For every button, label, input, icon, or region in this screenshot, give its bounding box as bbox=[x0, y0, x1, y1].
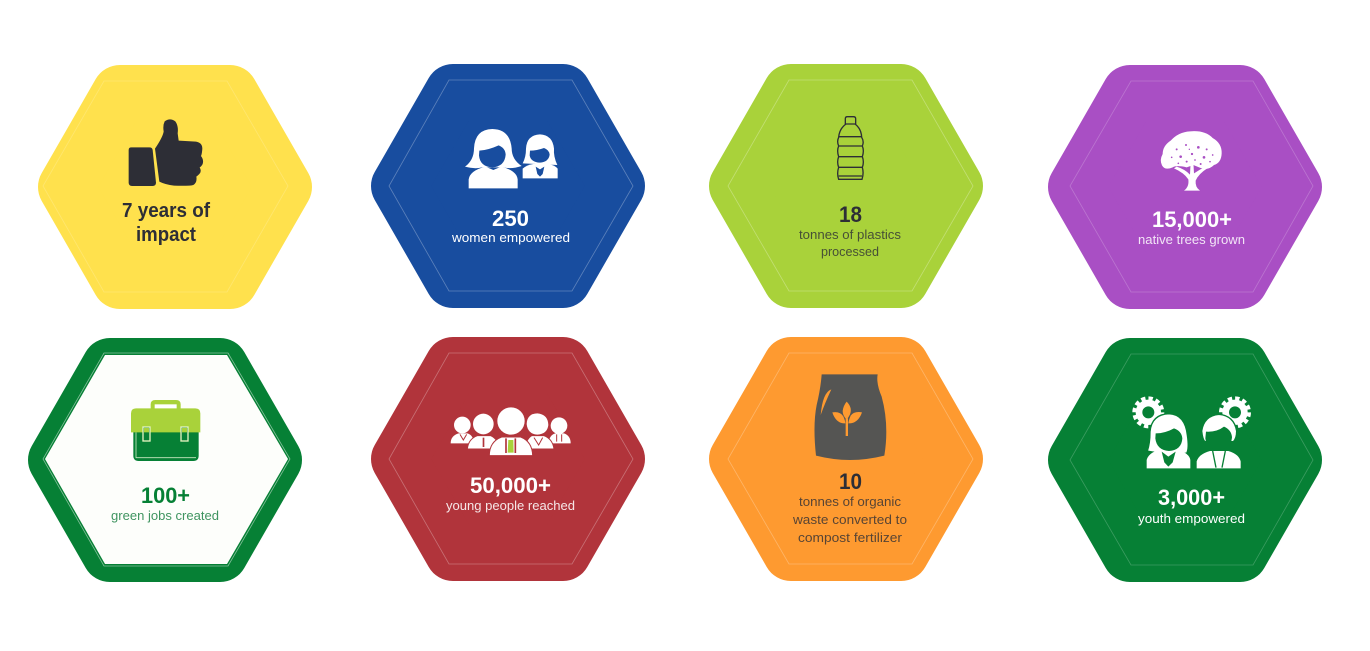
panel: tonnes of organic waste converted to compost fertilizer bbox=[728, 353, 973, 564]
icon: compost bag bbox=[814, 374, 886, 460]
panel: young people reached bbox=[389, 353, 633, 564]
stat: 10 tonnes of organic waste converted to compost fertilizer: compost fertilizer bbox=[798, 530, 903, 545]
icon: group of people bbox=[451, 407, 571, 456]
stat: 10 tonnes of organic waste converted to compost fertilizer: waste converted to bbox=[792, 512, 907, 527]
hexagon: lime bbox=[737, 92, 955, 280]
stat: 15,000+ native trees grown bbox=[1138, 207, 1245, 247]
hexagon: blue bbox=[399, 92, 617, 280]
stat: 15,000+ native trees grown: 15,000+ bbox=[1152, 207, 1232, 232]
stat: 18 tonnes of plastics processed bbox=[799, 202, 901, 259]
panel: green jobs created bbox=[43, 353, 290, 566]
icon: tree bbox=[1161, 131, 1222, 191]
stat: 250 women empowered bbox=[451, 206, 570, 245]
hexagon: red bbox=[399, 365, 617, 553]
heading: 7 years of impact: 7 years of bbox=[122, 200, 210, 222]
stat: 15,000+ native trees grown: native trees grown bbox=[1138, 232, 1245, 247]
stat: 3,000+ youth empowered: 3,000+ bbox=[1158, 485, 1225, 510]
stat: 100+ green jobs created bbox=[111, 483, 219, 523]
stat: 3,000+ youth empowered: youth empowered bbox=[1138, 511, 1245, 526]
stat: 250 women empowered: 250 bbox=[492, 206, 529, 231]
panel: tonnes of plastics processed bbox=[728, 80, 973, 291]
stat: 250 women empowered: women empowered bbox=[451, 230, 570, 245]
hexagon: orange bbox=[737, 365, 955, 553]
stat: 18 tonnes of plastics processed: processed bbox=[821, 244, 879, 259]
hexagon: yellow bbox=[66, 93, 284, 281]
hexagon: dark green bbox=[1076, 366, 1294, 554]
stat: 50,000+ young people reached: young people reached bbox=[446, 498, 575, 513]
panel: native trees grown bbox=[1070, 81, 1313, 292]
heading: 7 years of impact: impact bbox=[136, 224, 196, 246]
heading: 7 years of impact bbox=[122, 200, 210, 246]
panel: women empowered bbox=[389, 80, 633, 291]
icon: two women bbox=[465, 129, 558, 188]
stat: 18 tonnes of plastics processed: tonnes of plastics bbox=[799, 227, 901, 242]
stat: 50,000+ young people reached bbox=[446, 473, 575, 513]
icon: young woman and man with gears bbox=[1134, 398, 1249, 468]
icon: thumbs up bbox=[129, 119, 203, 186]
panel: 7 years of impact bbox=[43, 81, 288, 292]
stat: 10 tonnes of organic waste converted to compost fertilizer: tonnes of organic bbox=[799, 494, 902, 509]
hexagon: white with green border bbox=[56, 366, 274, 554]
stat: 50,000+ young people reached: 50,000+ bbox=[470, 473, 551, 498]
stat: 3,000+ youth empowered bbox=[1138, 485, 1245, 526]
stat: 18 tonnes of plastics processed: 18 bbox=[839, 202, 862, 227]
stat: 10 tonnes of organic waste converted to compost fertilizer bbox=[792, 469, 907, 545]
icon: briefcase bbox=[131, 400, 200, 461]
panel: youth empowered bbox=[1070, 354, 1313, 565]
icon: plastic bottle bbox=[838, 117, 863, 179]
stat: 100+ green jobs created: 100+ bbox=[141, 483, 190, 508]
stat: 10 tonnes of organic waste converted to compost fertilizer: 10 bbox=[839, 469, 862, 494]
hexagon: purple bbox=[1076, 93, 1294, 281]
stat: 100+ green jobs created: green jobs created bbox=[111, 508, 219, 523]
